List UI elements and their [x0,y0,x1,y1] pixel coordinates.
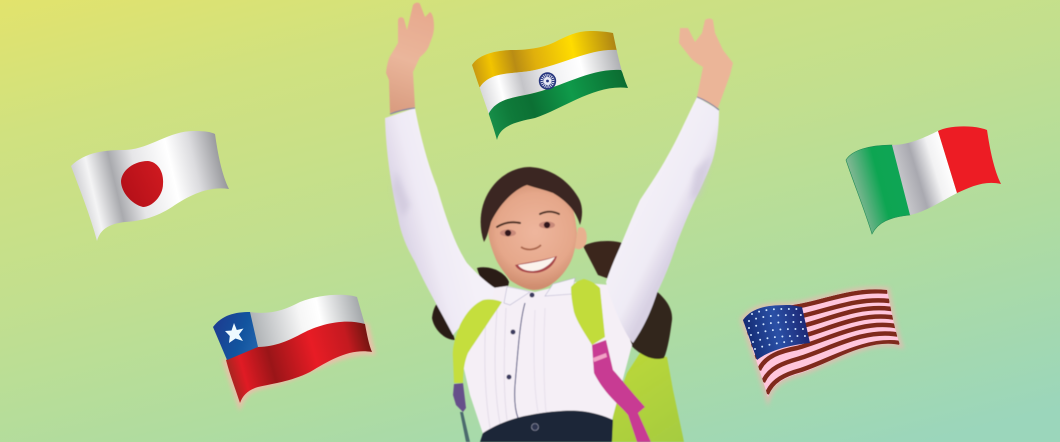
backpack body [612,353,684,442]
right backpack strap [571,279,605,345]
pink halo [226,325,372,403]
face [488,185,577,290]
blue canton [213,312,258,360]
flag: USA [735,280,910,405]
upper hair pigtail left [477,267,509,300]
white stripe [250,295,365,348]
shirt placket and pleats [485,303,546,428]
red stripe [226,322,372,403]
upper hair pigtail right [583,241,622,280]
skirt button [532,424,538,430]
smile [515,256,557,273]
sleeve shading folds [393,155,712,218]
Ashoka chakra [539,72,556,90]
hair cap [481,167,582,242]
lower hair pigtail left [432,300,455,340]
green stripe [488,70,628,140]
sleeve cuffs [390,97,719,114]
left strap buckle [453,383,466,412]
girl [385,3,733,442]
flag: Japan [71,131,229,241]
eyes [500,221,555,237]
left backpack strap [453,299,502,383]
left arm skin [386,3,434,113]
Japan red disc [121,161,163,207]
blue canton with stars [743,305,810,360]
lower hair pigtail right [628,290,672,359]
collar [504,278,575,305]
eyebrows [497,212,559,227]
white stripe [480,50,622,114]
flag: Chile [213,295,372,403]
right arm skin [679,18,733,108]
flag: India [472,31,628,140]
white star [225,323,244,343]
ear [575,227,587,249]
stripes [743,289,900,396]
shirt buttons [506,292,534,380]
pink strap [592,340,651,442]
pink halo [743,289,900,397]
left sleeve [385,108,495,335]
skirt [480,411,613,442]
saffron stripe [472,31,617,90]
nose [521,245,541,249]
torso shirt [462,282,632,434]
right sleeve [606,97,719,343]
flag: Italy [846,126,1001,234]
